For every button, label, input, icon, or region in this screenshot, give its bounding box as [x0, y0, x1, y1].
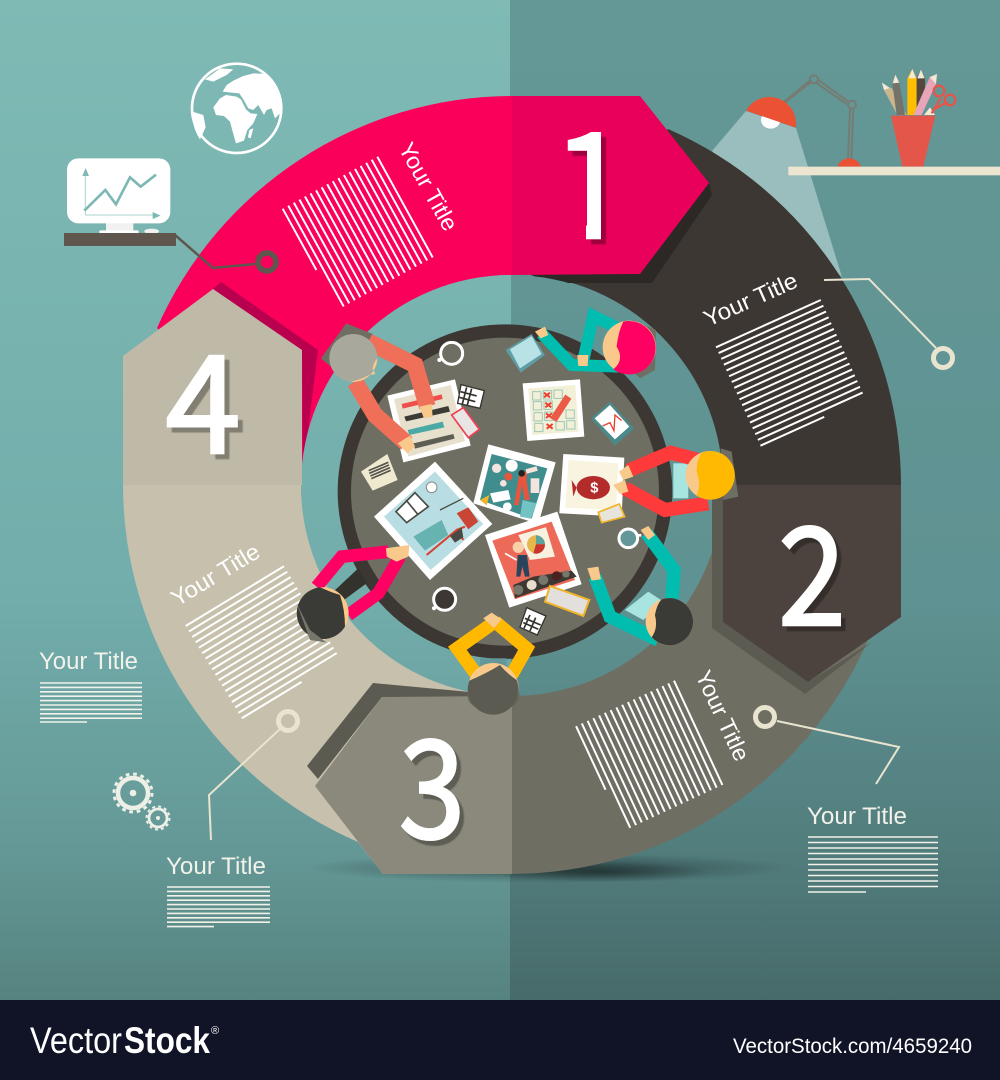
lamp light beam: [712, 111, 842, 277]
blueprint poster: [374, 462, 492, 580]
small note: [361, 454, 398, 491]
red presentation poster: [485, 512, 582, 608]
segment 1 text lines: [283, 157, 433, 309]
table: [338, 324, 672, 659]
person 4: dark hair, teal shirt: [587, 526, 693, 645]
connector: segment 2: [824, 279, 952, 368]
segment 4 arrow: [123, 289, 302, 485]
segment 2 arrow shadow: [712, 485, 872, 694]
bottom right text block: Your Title: [807, 803, 907, 830]
connector: segment 4: [209, 712, 298, 840]
segment 2 title: Your Title: [699, 267, 801, 332]
bottom left text block: [166, 853, 270, 927]
footer URL: VectorStock.com/4659240: [733, 1035, 972, 1058]
connector: segment 1: [175, 235, 276, 271]
grid card: [523, 379, 584, 441]
cup: right: [619, 529, 641, 548]
segment 2 arrow: [723, 485, 901, 682]
meeting table scene: [297, 316, 738, 715]
segment 4 title: Your Title: [166, 538, 264, 611]
number 4: 4: [165, 296, 241, 493]
segment 1 title: Your Title: [394, 138, 463, 235]
background right panel: [510, 0, 1000, 1000]
inner circle left half: [301, 275, 511, 695]
number 2: 2: [778, 468, 846, 665]
ground shadow: [305, 853, 795, 883]
pink arrow shadow: [530, 183, 712, 283]
money card: $: [590, 481, 598, 497]
notepad: top: [506, 334, 545, 373]
segment 3 arrow shadow: [307, 683, 470, 779]
segment 3 band: grey: [512, 485, 868, 874]
gold phone: [598, 504, 625, 523]
cup: bottom: [432, 588, 456, 610]
left text block: [39, 648, 142, 722]
segment 2 text lines: [716, 300, 865, 446]
calculator: bottom: [520, 608, 546, 635]
number 3: 3: [399, 680, 465, 877]
icon: gears: [114, 774, 170, 830]
segment 4 text lines: [186, 566, 340, 718]
person 3: yellow hair: [613, 448, 738, 510]
lamp arm: [782, 75, 856, 160]
inner circle right half: [511, 275, 721, 695]
pencils: [882, 69, 955, 167]
bottom right text block: [807, 803, 938, 892]
connector: segment 3: [756, 708, 899, 784]
footer bar: [0, 1000, 1000, 1080]
segment 4 band: beige: [123, 485, 470, 874]
segment 3 text lines: [576, 681, 722, 830]
bottom left text block: Your Title: [166, 853, 266, 880]
person 6: dark hair, pink shirt: [297, 545, 409, 643]
number 1: 1: [551, 68, 633, 281]
segment 2 band: dark: [530, 129, 901, 485]
footer logo: [30, 1020, 219, 1061]
teal poster: [473, 444, 556, 524]
left text block: Your Title: [39, 648, 138, 675]
icon: globe: [192, 64, 281, 153]
segment 4 arrow shadow: [213, 282, 318, 470]
footer logo: Vector: [30, 1020, 122, 1061]
person 5: grey hair, yellow shirt: [457, 613, 527, 715]
calculator: top: [458, 385, 484, 408]
footer logo: Stock: [124, 1020, 210, 1061]
cup: top: [437, 342, 463, 364]
money card: [559, 454, 624, 517]
gold phone lower: [545, 586, 589, 616]
shelf with lamp and pencil cup: [746, 69, 1000, 175]
lamp shade: [746, 97, 861, 167]
footer logo: ®: [211, 1025, 219, 1037]
shelf board: [788, 167, 1000, 175]
person 2: pink hair: [535, 316, 656, 378]
segment 3 arrow left: [315, 696, 512, 874]
tablet chart: [591, 402, 634, 446]
icon: monitor on desk with chart: [64, 158, 176, 246]
person 1: grey hair: [323, 325, 433, 453]
red notebook: [452, 408, 479, 438]
segment 3 title: Your Title: [690, 666, 755, 765]
panel card: [387, 379, 471, 462]
segment 1 band and arrow: pink: [157, 96, 709, 470]
background left panel: [0, 0, 510, 1000]
